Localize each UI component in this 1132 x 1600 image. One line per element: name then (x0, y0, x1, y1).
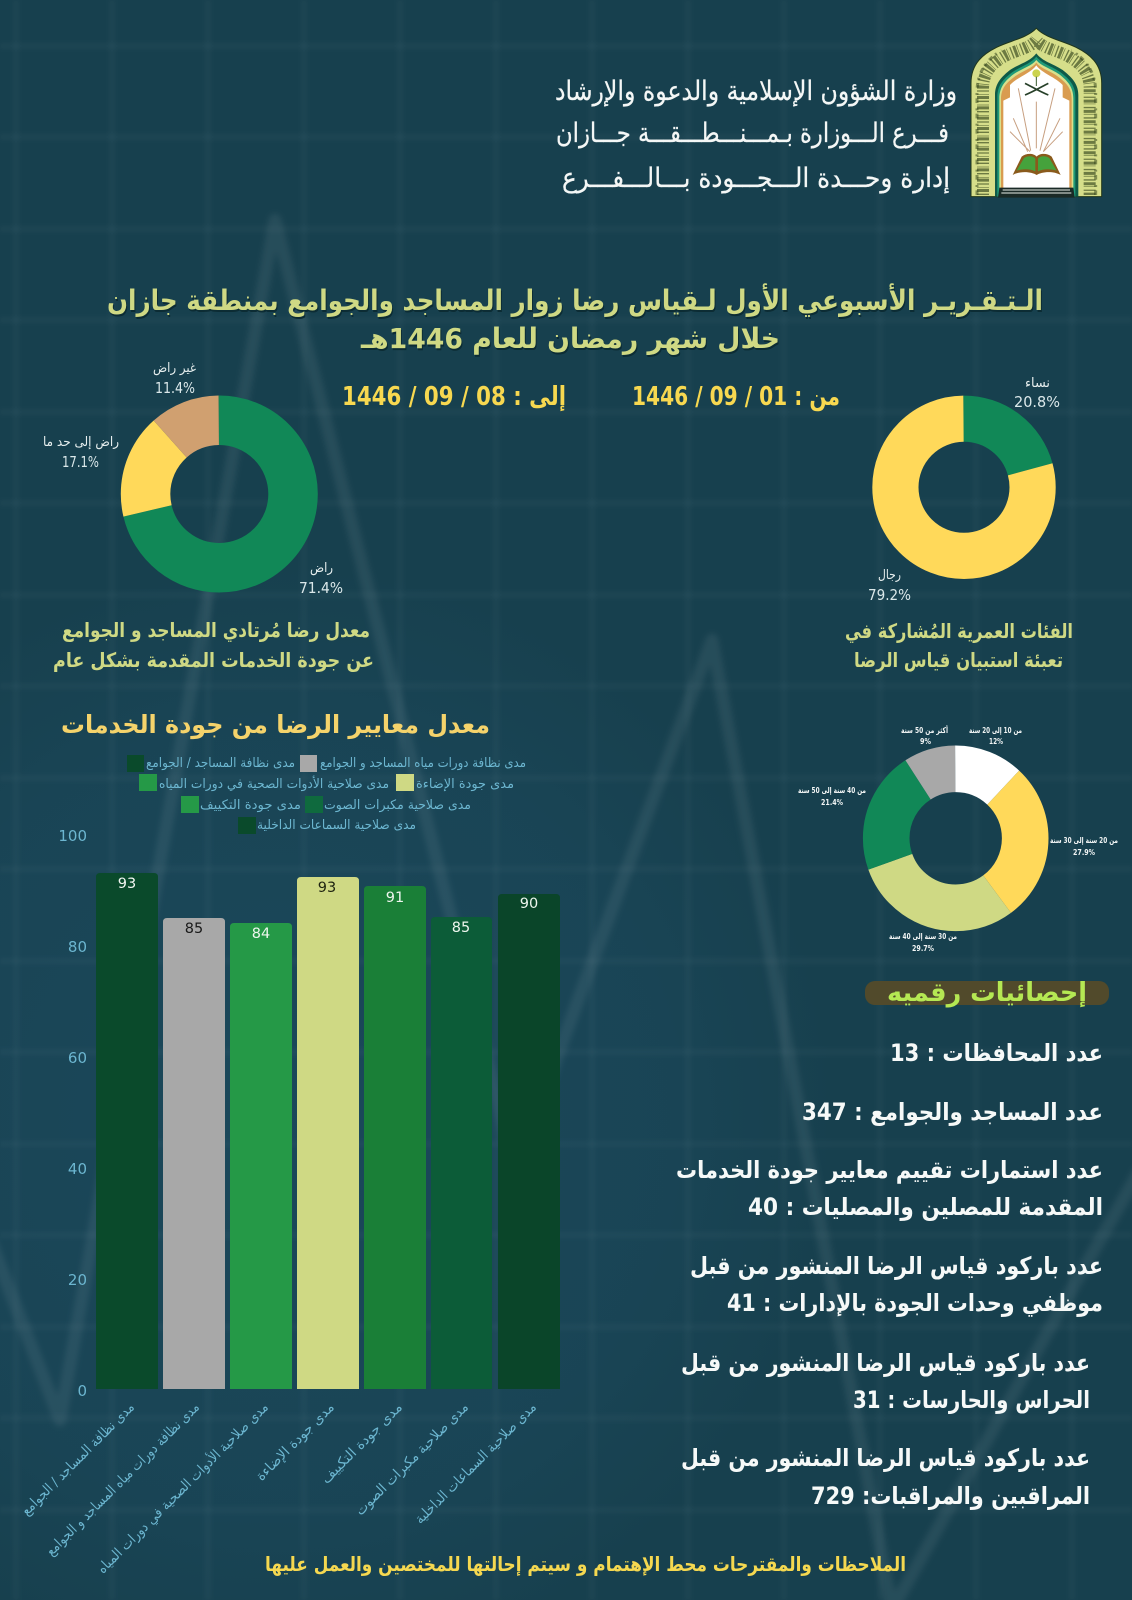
value: not satisfied: 11.4% (155, 379, 195, 397)
header: ministry name (555, 76, 957, 194)
line 3: إدارة وحـــدة الـــجـــودة بـــالـــفـــرع (562, 163, 950, 194)
x axis labels: مدى جودة التكييف (318, 1400, 406, 1487)
legend (127, 755, 526, 834)
stat: guards barcode (681, 1349, 1090, 1414)
value: 27.9 percent: 27.9% (1073, 848, 1095, 857)
label: men: رجال (878, 568, 901, 583)
bar values: 85 (185, 921, 203, 937)
legend text: مدى صلاحية مكبرات الصوت (324, 798, 471, 813)
stat: supervisors barcode: المراقبين والمراقبات: 729 (811, 1482, 1090, 1510)
legend text: مدى جودة الإضاءة (416, 777, 514, 792)
x axis labels: مدى نظافة دورات مياه المساجد و الجوامع (43, 1400, 203, 1559)
label: not satisfied: غير راض (153, 361, 196, 376)
bar values: 91 (386, 890, 404, 906)
value: satisfied: 71.4% (299, 579, 343, 597)
bar values: 85 (452, 920, 470, 936)
x axis labels: مدى نظافة المساجد / الجوامع (18, 1400, 138, 1519)
panel: bar chart section (18, 710, 560, 1577)
legend text: مدى جودة التكييف (200, 798, 301, 813)
title (107, 283, 1043, 355)
label: over 50: أكثر من 50 سنة (901, 725, 948, 735)
bar values: 90 (520, 896, 538, 912)
x axis labels: مدى صلاحية الأدوات الصحية في دورات المياه (93, 1398, 272, 1577)
bar values: 93 (318, 880, 336, 896)
stat: mosques: عدد المساجد والجوامع : 347 (802, 1098, 1103, 1126)
legend text (146, 756, 526, 833)
caption line 1: الفئات العمرية المُشاركة في (845, 619, 1073, 644)
y axis labels: 20 (68, 1271, 87, 1289)
panel: age donut (798, 725, 1118, 953)
donut chart: age groups (886, 769, 1025, 908)
bars (96, 873, 560, 1389)
date from: من : ⁦1446 / 09 / 01⁩ (632, 382, 840, 412)
label: satisfied: راض (310, 561, 333, 576)
y axis labels: 100 (58, 827, 87, 845)
bar values: 93 (118, 876, 136, 892)
legend text: مدى صلاحية الأدوات الصحية في دورات المياه (159, 775, 389, 792)
x axis labels: مدى صلاحية السماعات الداخلية (412, 1400, 540, 1528)
stat: governorates: عدد المحافظات : 13 (890, 1039, 1103, 1067)
stat: supervisors barcode (681, 1444, 1090, 1510)
y axis labels: 40 (68, 1160, 87, 1178)
label: women: نساء (1025, 376, 1050, 391)
label: 30 to 40: من 30 سنة إلى 40 سنة (889, 932, 957, 941)
legend text: مدى نظافة دورات مياه المساجد و الجوامع (320, 756, 526, 771)
panel: gender donut (845, 376, 1073, 672)
label: 10 to 20: من 10 إلى 20 سنة (969, 726, 1022, 735)
value: men: 79.2% (868, 586, 911, 604)
value: 12 percent: 12% (989, 737, 1003, 746)
value: somewhat satisfied: 17.1% (62, 453, 99, 471)
label: somewhat satisfied: راض إلى حد ما (43, 435, 119, 450)
y axis labels: 0 (77, 1382, 87, 1400)
value: 21.4 percent: 21.4% (821, 798, 843, 807)
panel: overall satisfaction donut (43, 361, 374, 672)
panel: numeric statistics (676, 978, 1109, 1510)
caption line 2: تعبئة استبيان قياس الرضا (854, 648, 1063, 672)
donut chart: gender (895, 419, 1033, 556)
title line 2: خلال شهر رمضان للعام 1446هـ (360, 322, 780, 355)
stat: forms (676, 1156, 1103, 1221)
line 1: وزارة الشؤون الإسلامية والدعوة والإرشاد (555, 76, 957, 107)
value: 9 percent: 9% (920, 737, 931, 746)
x axis labels: مدى صلاحية مكبرات الصوت (352, 1400, 472, 1519)
value: 29.7 percent: 29.7% (912, 944, 934, 953)
caption line 2: عن جودة الخدمات المقدمة بشكل عام (53, 648, 374, 672)
date to: إلى : ⁦1446 / 09 / 08⁩ (342, 382, 566, 412)
caption line 1: معدل رضا مُرتادي المساجد و الجوامع (62, 618, 370, 643)
x axis labels (18, 1398, 540, 1577)
stats heading: إحصائيات رقميه (887, 978, 1087, 1008)
icon: ministry logo (971, 28, 1102, 198)
legend text: مدى نظافة المساجد / الجوامع (146, 756, 295, 771)
stat: guards barcode: الحراس والحارسات : 31 (853, 1386, 1090, 1414)
x axis labels: مدى جودة الإضاءة (253, 1400, 338, 1484)
y axis labels: 80 (68, 938, 87, 956)
label: 40 to 50: من 40 سنة إلى 50 سنة (798, 786, 866, 795)
label: 20 to 30: من 20 سنة إلى 30 سنة (1050, 836, 1118, 845)
footer note: الملاحظات والمقترحات محط الإهتمام و سيتم إحالتها للمختصين والعمل عليها (265, 1552, 906, 1576)
stat: quality unit barcode (690, 1252, 1103, 1317)
bar values: 84 (252, 926, 270, 942)
bar values (118, 876, 538, 942)
donut chart: satisfaction (146, 420, 293, 568)
legend text: مدى صلاحية السماعات الداخلية (257, 818, 416, 833)
value: women: 20.8% (1014, 393, 1060, 411)
y axis labels (58, 827, 87, 1400)
stat: forms: المقدمة للمصلين والمصليات : 40 (748, 1193, 1103, 1221)
legend swatches (127, 755, 414, 834)
y axis labels: 60 (68, 1049, 87, 1067)
chart heading: معدل معايير الرضا من جودة الخدمات (61, 710, 490, 740)
line 2: فـــرع الـــوزارة بـمـــنـــطـــقـــة جـــازان (556, 118, 949, 149)
